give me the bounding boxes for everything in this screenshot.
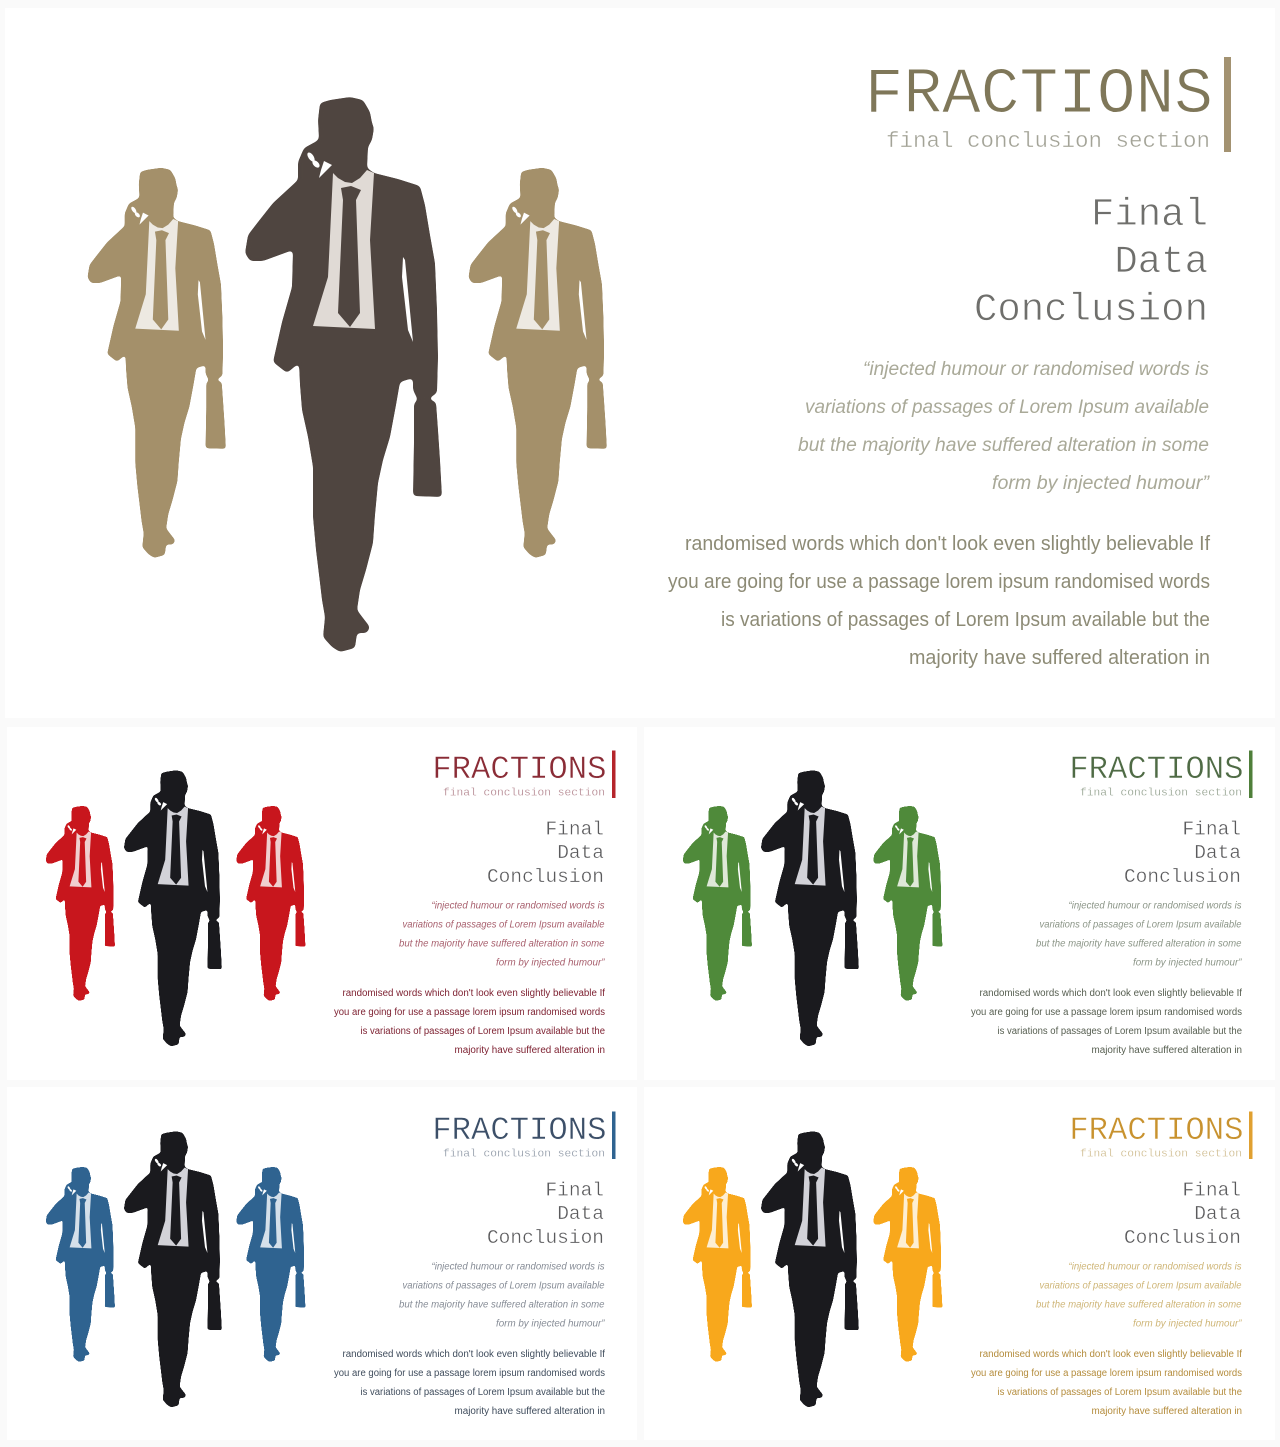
heading: Data (1194, 1203, 1241, 1225)
heading: Final (1182, 1180, 1241, 1202)
heading: Data (557, 1203, 604, 1225)
quote text: form by injected humour” (496, 1318, 605, 1330)
heading: Data (557, 842, 604, 864)
quote text: variations of passages of Lorem Ipsum available (1040, 1280, 1242, 1292)
body text: you are going for use a passage lorem ipsum randomised words (971, 1007, 1242, 1018)
panel: blue slide (7, 1087, 637, 1440)
body text: you are going for use a passage lorem ipsum randomised words (971, 1368, 1242, 1379)
body text (971, 988, 1242, 1056)
figure: right green businessman (873, 806, 942, 1001)
heading: Conclusion (1124, 1227, 1241, 1249)
quote text: form by injected humour” (992, 472, 1211, 494)
title: FRACTIONS (432, 751, 606, 788)
figure: right red businessman (236, 806, 305, 1001)
quote text (399, 1262, 605, 1330)
quote text: variations of passages of Lorem Ipsum available (1040, 920, 1242, 930)
title: FRACTIONS (865, 59, 1213, 132)
heading: Conclusion (487, 1227, 604, 1249)
body text (668, 533, 1210, 669)
heading: final data conclusion (974, 193, 1208, 332)
body text: randomised words which don't look even slightly believable If (980, 1349, 1242, 1360)
panel: main beige slide (5, 8, 1275, 718)
quote text: “injected humour or randomised words is (1068, 900, 1242, 912)
figure: left blue businessman (46, 1167, 115, 1362)
body text: randomised words which don't look even slightly believable If (342, 988, 605, 999)
slide background (5, 8, 1275, 718)
figure: central black businessman (761, 770, 859, 1046)
quote text (1036, 900, 1242, 968)
body text: randomised words which don't look even slightly believable If (980, 988, 1242, 999)
body text: randomised words which don't look even slightly believable If (685, 533, 1210, 555)
subtitle: final conclusion section (1080, 1148, 1242, 1160)
quote text: form by injected humour” (1133, 958, 1242, 968)
accent bar (1249, 1112, 1252, 1159)
figure: central black businessman (124, 770, 222, 1046)
slide contents (46, 750, 615, 1056)
heading (487, 818, 604, 888)
quote text: form by injected humour” (1133, 1318, 1242, 1330)
heading (487, 1180, 604, 1249)
body text (334, 988, 605, 1056)
heading: Data (1194, 842, 1241, 864)
accent bar (1224, 57, 1231, 152)
figure: right yellow businessman (873, 1167, 942, 1362)
body text: majority have suffered alteration in (454, 1045, 605, 1056)
quote text (1036, 1262, 1242, 1330)
panel: red slide (7, 727, 637, 1080)
panel: green slide (644, 727, 1275, 1080)
heading: Conclusion (1124, 866, 1241, 888)
subtitle: final conclusion section (1080, 788, 1242, 800)
slide background (7, 727, 637, 1080)
body text: you are going for use a passage lorem ipsum randomised words (668, 571, 1210, 593)
slide contents (683, 750, 1252, 1056)
heading: Conclusion (487, 866, 604, 888)
figure: right blue businessman (236, 1167, 305, 1362)
body text: majority have suffered alteration in (909, 647, 1210, 669)
heading: final data conclusion: Final (1091, 193, 1208, 237)
accent bar (612, 750, 616, 798)
quote text: “injected humour or randomised words is (863, 358, 1209, 380)
quote text: “injected humour or randomised words is (432, 900, 605, 912)
slide contents (46, 1112, 615, 1417)
body text: is variations of passages of Lorem Ipsum available but the (721, 609, 1210, 631)
body text: majority have suffered alteration in (454, 1406, 605, 1417)
accent bar (1249, 750, 1252, 798)
quote text: but the majority have suffered alteration in some (1036, 1300, 1242, 1310)
body text: is variations of passages of Lorem Ipsum available but the (360, 1026, 605, 1037)
body text (334, 1349, 605, 1417)
quote text: variations of passages of Lorem Ipsum available (402, 1280, 605, 1292)
quote text: “injected humour or randomised words is (432, 1262, 605, 1272)
subtitle: final conclusion section (443, 788, 605, 800)
quote text: variations of passages of Lorem Ipsum available (805, 396, 1209, 418)
quote text: form by injected humour” (496, 958, 605, 968)
subtitle: final conclusion section (443, 1148, 605, 1160)
figure: central black businessman (761, 1131, 859, 1407)
subtitle: final conclusion section (886, 128, 1210, 154)
heading: Final (545, 1180, 604, 1202)
figure: left yellow businessman (683, 1167, 752, 1362)
heading: Final (545, 818, 604, 840)
heading: final data conclusion: Conclusion (974, 288, 1208, 332)
title: FRACTIONS (1069, 1112, 1244, 1149)
quote text: but the majority have suffered alteration in some (399, 938, 605, 950)
body text: majority have suffered alteration in (1092, 1406, 1242, 1417)
body text: majority have suffered alteration in (1092, 1045, 1242, 1056)
quote text (399, 900, 605, 968)
body text: you are going for use a passage lorem ipsum randomised words (334, 1007, 605, 1018)
slide background (644, 1087, 1275, 1440)
quote text (798, 358, 1211, 494)
quote text: variations of passages of Lorem Ipsum available (402, 920, 605, 930)
body text: is variations of passages of Lorem Ipsum available but the (360, 1387, 605, 1398)
heading: final data conclusion: Data (1114, 240, 1208, 284)
slide contents (683, 1112, 1252, 1417)
figure: left red businessman (46, 806, 115, 1001)
heading (1124, 818, 1241, 888)
quote text: but the majority have suffered alteration in some (1036, 938, 1242, 950)
figure: central brown businessman (245, 97, 442, 652)
quote text: but the majority have suffered alteration in some (399, 1300, 605, 1310)
accent bar (612, 1112, 616, 1159)
slide background (644, 727, 1275, 1080)
slide background (7, 1087, 637, 1440)
figure: right beige businessman (468, 168, 607, 558)
quote text: but the majority have suffered alteration in some (798, 434, 1209, 456)
panel: yellow slide (644, 1087, 1275, 1440)
heading: Final (1182, 818, 1241, 840)
quote text: “injected humour or randomised words is (1068, 1262, 1242, 1272)
body text (971, 1349, 1242, 1417)
body text: is variations of passages of Lorem Ipsum available but the (998, 1387, 1242, 1398)
figure: central black businessman (124, 1131, 222, 1407)
body text: is variations of passages of Lorem Ipsum available but the (998, 1026, 1242, 1037)
heading (1124, 1180, 1241, 1249)
body text: randomised words which don't look even slightly believable If (342, 1349, 605, 1360)
figure: left green businessman (683, 806, 752, 1001)
body text: you are going for use a passage lorem ipsum randomised words (334, 1368, 605, 1379)
title: FRACTIONS (1069, 751, 1244, 788)
title: FRACTIONS (432, 1112, 606, 1149)
figure: left beige businessman (87, 168, 226, 558)
